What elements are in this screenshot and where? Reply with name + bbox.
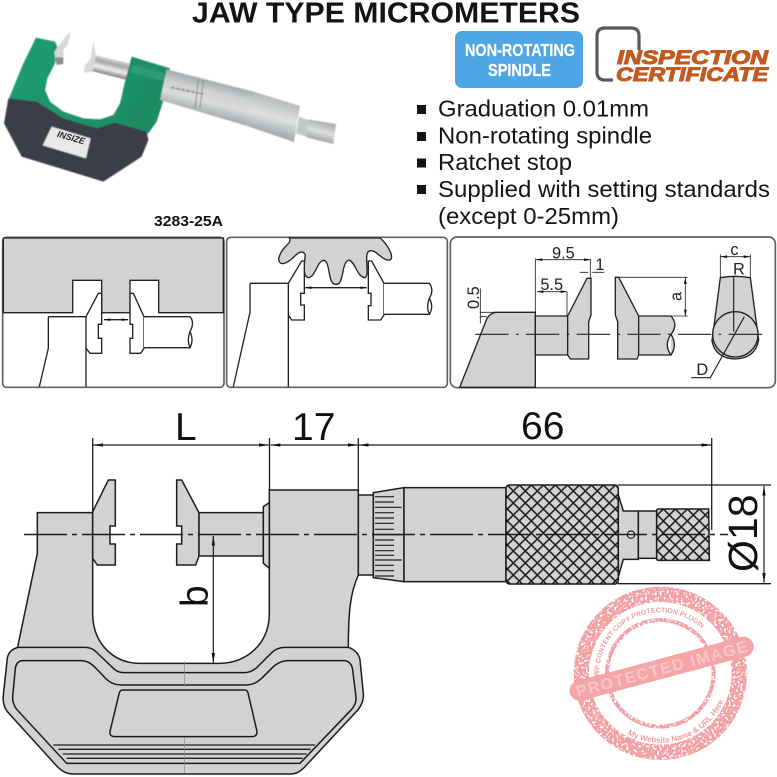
band [567,634,756,703]
logo: inspection certificate [597,28,770,86]
sleeve highlight [131,65,168,82]
inner ring [607,620,714,727]
fixed jaw [54,32,71,65]
end view circle [713,312,758,357]
spindle [384,283,432,314]
anvil outline [39,317,86,387]
bullet 3 [417,158,426,168]
base inset [13,661,356,763]
dimension L: L [175,406,197,449]
moving jaw [177,480,199,565]
cone [618,495,638,577]
fixed jaw [86,293,102,353]
model label: 3283-25A [154,214,224,230]
grip label [43,127,91,158]
end view jaw [712,276,759,359]
bullet 1 [417,105,426,114]
shaft section [535,316,568,355]
labels [465,241,745,379]
label 5.5: 5.5 [540,276,563,294]
dimension b [174,536,217,663]
dimension 66: 66 [521,405,564,448]
collar [263,503,269,568]
dimension diameter 18: Ø18 [720,494,766,572]
leader D [691,277,744,378]
thimble knurl [245,92,300,142]
spindle [144,317,192,348]
feature 3: Ratchet stop [438,149,572,175]
badge: non-rotating spindle: NON-ROTATING [465,40,575,60]
left jaw [568,278,591,359]
pin [627,531,635,538]
badge: non-rotating spindle [455,31,583,88]
spindle [92,55,129,80]
right jaw [615,277,639,359]
label a: a [668,291,686,301]
brand on grip: INSIZE [56,129,87,147]
outer ring [581,594,739,752]
band text: PROTECTED IMAGE [574,639,750,701]
frame body [17,490,358,677]
moving jaw [368,261,384,320]
dimension 17 [271,406,358,490]
watermark: protected image stamp [570,586,754,760]
dimension b: b [174,585,217,607]
bullet 2 [417,132,426,141]
logo: inspection certificate: CERTIFICATE [616,65,770,86]
moving jaw [130,293,144,353]
dim 9.5 arrows [536,258,590,261]
label 9.5: 9.5 [552,245,575,263]
label c: c [730,241,739,259]
label D: D [696,361,708,379]
bottom arc text: My Website Name & URL Here [628,700,723,743]
fixed jaw tip [55,57,63,65]
feature 2: Non-rotating spindle [438,122,652,148]
centre marks [183,662,185,773]
feature list [417,96,770,229]
feature 4: Supplied with setting standards [438,176,770,202]
dim 1 arrows [580,271,604,274]
fixed jaw [93,480,115,565]
panel: jaw dimensions [450,237,775,388]
label recess [110,690,257,737]
label 0.5: 0.5 [465,286,483,309]
dim a arrows [684,278,687,316]
barrel [160,69,255,125]
dimension lines [480,254,750,323]
logo: inspection certificate: INSPECTION [617,48,770,69]
panel: measuring a slot [3,237,224,387]
feature 4 continued: (except 0-25mm) [438,203,619,229]
badge: non-rotating spindle: SPINDLE [488,60,551,80]
dimension L [93,406,270,512]
thimble bevel [373,488,404,582]
graduation ticks [375,497,403,576]
dim c arrows [721,255,750,258]
gap arrow [104,318,128,322]
anvil outline [233,283,288,387]
scale ticks [170,80,203,108]
right shaft [639,316,675,355]
workpiece with slot [3,238,223,313]
dimension 17: 17 [292,406,335,449]
label 1: 1 [595,256,604,274]
centre line [475,333,769,336]
knurled ratchet [657,509,709,560]
gear [279,238,392,284]
ratchet collar [296,117,310,137]
barrel [404,488,506,582]
main drawing: outer dimensions [3,405,771,774]
anvil section [460,312,535,387]
green frame [8,38,170,133]
product photo: micrometer [4,32,336,182]
panel: measuring a gear [227,237,447,387]
moving jaw [84,40,96,73]
rubber grip [4,98,148,182]
centre line [24,534,728,536]
spindle [199,513,263,556]
dim 5.5 arrows [537,290,567,293]
rubber base [3,647,363,774]
knurled thimble [506,485,618,584]
fixed jaw [288,261,304,320]
neck [358,495,373,575]
top arc text: WP CONTENT COPY PROTECTION PLUGIN [594,608,704,676]
micrometer frame and jaws [3,480,363,774]
ratchet [307,119,336,144]
feature 1: Graduation 0.01mm [438,96,649,122]
micrometer head [358,485,709,584]
gap arrow [305,286,367,290]
dimension diameter 18 [618,485,771,584]
label R: R [733,260,745,278]
bullet 4 [417,185,426,194]
ratchet neck [638,511,657,558]
base ribs [53,745,315,758]
